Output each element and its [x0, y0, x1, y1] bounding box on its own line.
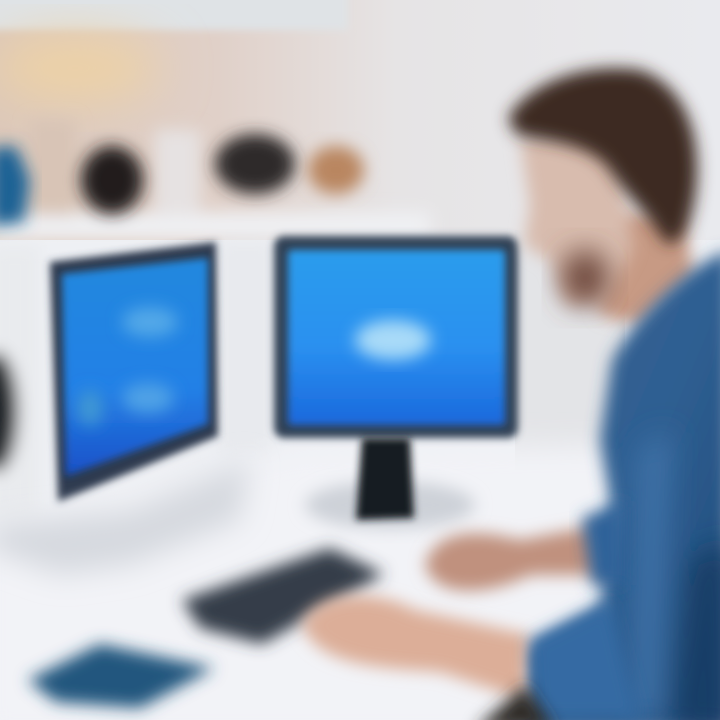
icon: dark bowl on shelf [215, 134, 295, 194]
shelf [0, 120, 430, 240]
monitor frame [50, 242, 218, 502]
monitor frame [274, 236, 518, 438]
face [520, 130, 632, 304]
left monitor [0, 242, 250, 575]
shirt [525, 250, 720, 720]
rear sleeve [582, 500, 625, 585]
monitor stand [356, 438, 414, 520]
left white frame and desk object [0, 240, 274, 525]
shelf objects [0, 134, 364, 226]
neck [590, 215, 695, 325]
front sleeve [530, 600, 640, 720]
screen highlight [355, 320, 431, 360]
monitor screen [62, 258, 208, 476]
warm lamp glow [0, 36, 160, 100]
monitor screen [288, 250, 505, 425]
icon: terracotta pot on shelf [308, 146, 364, 194]
screen highlights [77, 307, 178, 426]
beard shadow [561, 250, 609, 306]
icon: blue object on shelf [0, 146, 30, 226]
phone on desk [28, 644, 214, 708]
rear arm and hand [425, 525, 605, 591]
monitor base and keyboard [0, 460, 250, 575]
desk surface [0, 445, 620, 720]
hair [508, 68, 697, 243]
icon: black cup on shelf [81, 146, 143, 214]
monitor base [305, 481, 475, 529]
front arm and hand [302, 596, 530, 700]
person [302, 68, 720, 720]
right monitor [274, 236, 518, 529]
shirt fold shadows [630, 430, 720, 720]
ceiling panel [0, 0, 348, 30]
dark lower edge [475, 685, 555, 720]
keyboard [182, 548, 384, 644]
